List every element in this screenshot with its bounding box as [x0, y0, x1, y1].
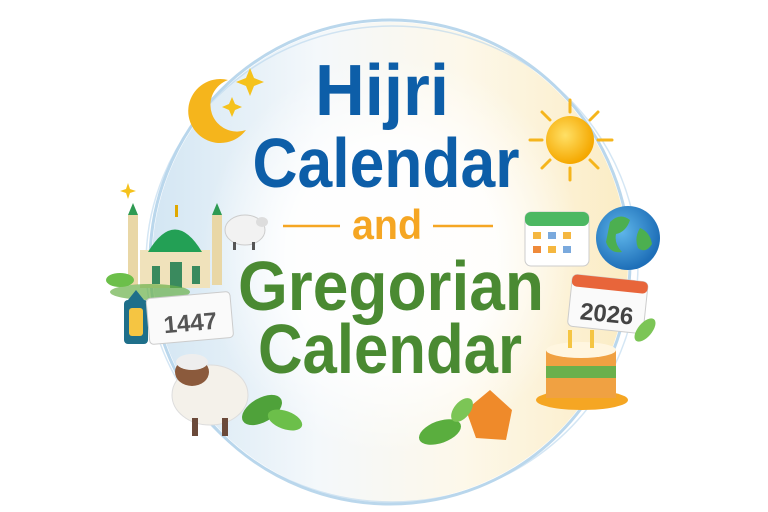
title: Calendar (green): Calendar — [258, 310, 522, 388]
icon: autumn leaves — [416, 315, 659, 450]
icon: crescent moon — [120, 68, 264, 199]
icon: cake — [536, 330, 628, 410]
icon: 1447 sign: 1447 — [163, 308, 218, 339]
icon: 2026 calendar: 2026 — [579, 298, 635, 331]
icon: big sheep — [172, 354, 248, 436]
icon: lantern — [124, 290, 148, 344]
connector: and: and — [352, 201, 422, 248]
icon: calendar — [525, 212, 589, 266]
icon: 2026 calendar — [567, 274, 648, 334]
title: Calendar (blue): Calendar — [252, 124, 520, 202]
icon: leaves left — [106, 273, 305, 435]
title: Hijri: Hijri — [315, 51, 449, 131]
icon: globe — [596, 206, 660, 270]
icon: sun — [530, 100, 612, 180]
icon: 1447 sign — [146, 291, 234, 345]
background circle — [146, 20, 638, 504]
icon: small sheep — [225, 215, 268, 250]
icon: mosque — [110, 203, 222, 300]
title: Gregorian: Gregorian — [238, 247, 544, 325]
